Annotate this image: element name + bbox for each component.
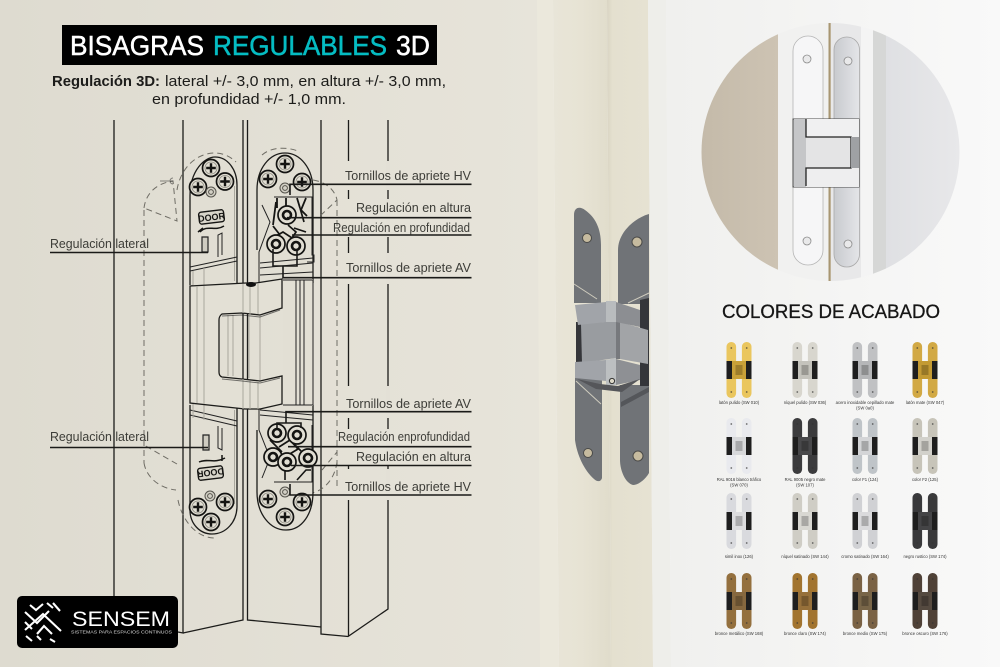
swatch: níquel pulido: níquel pulido (SW 036) [784, 400, 827, 405]
title: REGULABLES [213, 30, 387, 61]
icon: right plate [834, 37, 860, 267]
panel: circular hinge close-up photo [700, 20, 961, 285]
icon: plate screws [582, 234, 643, 461]
swatch: cromo satinado: cromo satinado (SW 164) [841, 554, 889, 559]
swatch: níquel pulido [784, 342, 827, 405]
callout labels: Tornillos de apriete AV [346, 397, 472, 411]
icon: DOOR tag: DOOR [198, 211, 226, 224]
swatch: simil inox [725, 493, 754, 559]
lower left hinge plate [190, 404, 237, 534]
callout rules and adjustment brackets [50, 184, 472, 495]
swatch: latón pulido [719, 342, 760, 405]
swatch: bronce oscuro: bronce oscuro (SW 176) [902, 631, 948, 636]
swatch: bronce medio [843, 573, 888, 636]
swatch: bronce metálico: bronce metálico (SW 168) [715, 631, 764, 636]
subtitle text block: lateral +/- 3,0 mm, en altura +/- 3,0 mm, [165, 73, 446, 90]
callout labels: Regulación lateral [50, 430, 149, 444]
icon: hinge centre [793, 119, 859, 187]
swatch: latón pulido: latón pulido (SW 010) [719, 400, 760, 405]
swatch: RAL 9005: RAL 9005 negro mate [785, 477, 826, 482]
callout labels [50, 169, 472, 494]
callout labels: Regulación en altura [356, 450, 471, 464]
panel: finish swatches [715, 342, 948, 636]
title [62, 25, 437, 65]
subtitle text block: Regulación 3D: [52, 73, 160, 90]
callout labels: Regulación enprofundidad [338, 430, 470, 444]
swatch: latón mate [906, 342, 945, 405]
title: BISAGRAS [70, 30, 204, 61]
callout labels: Tornillos de apriete AV [346, 261, 472, 275]
swatch: níquel satinado: níquel satinado (SW 144) [781, 554, 829, 559]
swatch: color F1 [852, 418, 879, 482]
swatch: RAL 9016 [717, 418, 762, 488]
swatch: negro rustico: negro rustico (SW 174) [903, 554, 947, 559]
swatch: simil inox: simil inox (126) [725, 554, 754, 559]
swatch: cromo satinado [841, 493, 889, 559]
upper right hinge plate [255, 153, 314, 283]
dashed door swing outlines [144, 148, 337, 538]
subtitle text block: en profundidad +/- 1,0 mm. [152, 91, 346, 108]
swatch: RAL 9016: RAL 9016 blanco tráfico [717, 477, 762, 482]
callout labels: Regulación lateral [50, 237, 149, 251]
icon: left plate [793, 36, 823, 265]
swatch: bronce claro [784, 573, 827, 636]
subtitle text block [52, 73, 446, 108]
swatch: acero inoxidable: acero inoxidable cepillado mate [836, 400, 895, 405]
icon: SENSEM mark [25, 603, 61, 642]
swatch: acero inoxidable [836, 342, 895, 410]
callout labels: Regulación en profundidad [333, 221, 470, 235]
logo: SENSEM [17, 596, 178, 648]
background: left beige panel [0, 0, 542, 667]
icon: DOOR tag inverted: DOOR [196, 466, 224, 479]
lower right hinge plate [255, 405, 317, 530]
callout labels: Tornillos de apriete HV [345, 480, 472, 494]
icon: grey hinge plates [574, 208, 649, 485]
swatch: bronce medio: bronce medio (SW 175) [843, 631, 888, 636]
swatch: bronce metálico [715, 573, 764, 636]
panel: door frame photo [537, 0, 1000, 667]
callout labels: Regulación en altura [356, 201, 471, 215]
swatch: color F2: color F2 (125) [912, 477, 939, 482]
hinge centre body [190, 279, 313, 409]
heading: finish colours: COLORES DE ACABADO [722, 301, 940, 323]
swatch: níquel satinado [781, 493, 829, 559]
door and frame outlines [114, 120, 390, 636]
swatch: bronce claro: bronce claro (SW 174) [784, 631, 827, 636]
swatch: RAL 9016: (SW 070) [730, 482, 748, 488]
title: 3D [396, 30, 430, 61]
swatch: color F1: color F1 (124) [852, 477, 879, 482]
swatch: color F2 [912, 418, 939, 482]
swatch: acero inoxidable: (SW 0a0) [856, 406, 874, 410]
logo: SENSEM: SENSEM [72, 608, 170, 631]
logo: SENSEM: SISTEMAS PARA ESPACIOS CONTINUOS [71, 630, 172, 636]
swatch: RAL 9005 [785, 418, 826, 488]
callout labels: Tornillos de apriete HV [345, 169, 472, 183]
swatch: bronce oscuro [902, 573, 948, 636]
swatch: negro rustico [903, 493, 947, 559]
icon: hinge body in door photo [575, 234, 649, 461]
diagram: hinge technical drawing [50, 120, 472, 636]
swatch: latón mate: latón mate (SW 047) [906, 400, 945, 405]
swatch: RAL 9005: (SW 107) [796, 482, 814, 488]
upper left hinge plate [190, 157, 237, 285]
